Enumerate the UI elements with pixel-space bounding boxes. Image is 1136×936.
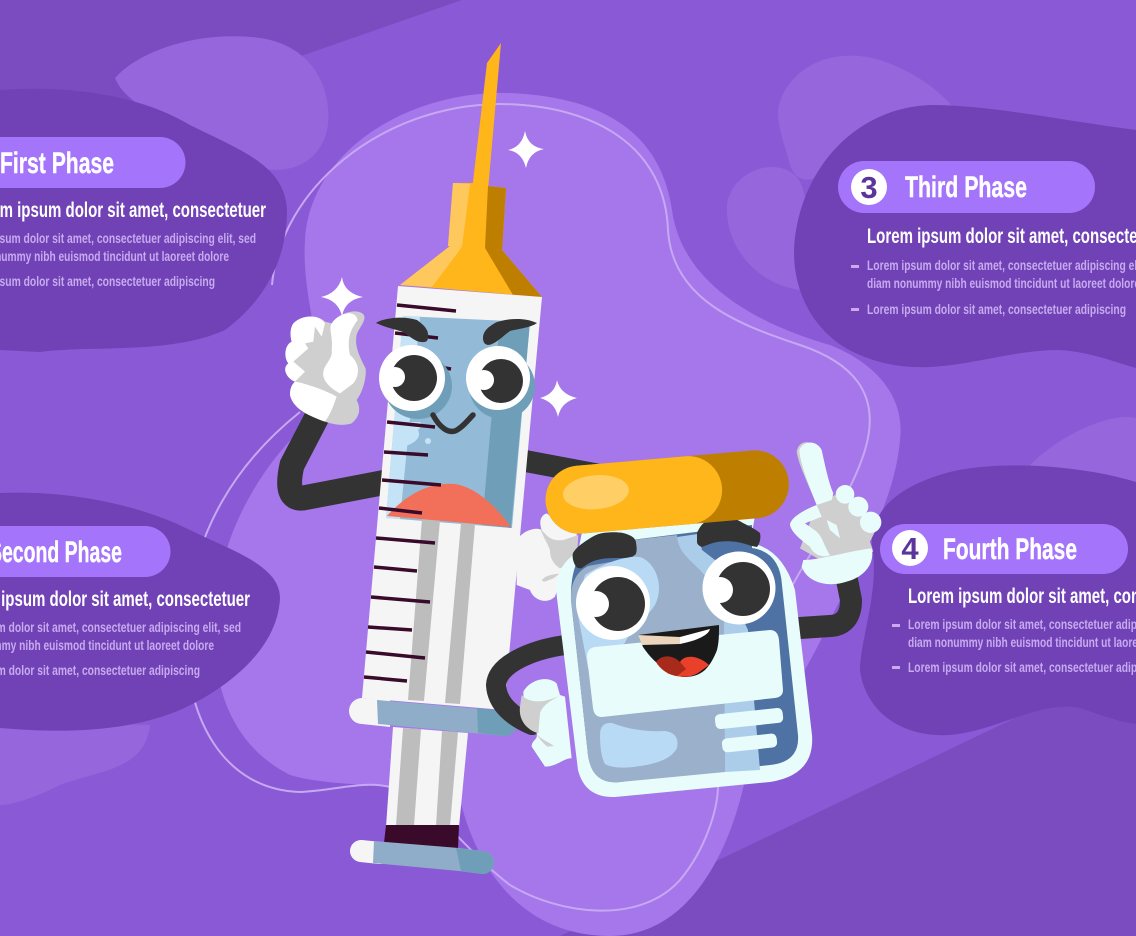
body text [892, 616, 1136, 675]
pill heading [0, 137, 186, 188]
vial character [496, 442, 881, 797]
sparkles [321, 131, 577, 417]
pill heading [0, 526, 170, 577]
flange [349, 698, 390, 727]
syringe arms [290, 415, 600, 498]
needle and hub [400, 43, 542, 297]
vial body [556, 516, 812, 797]
tick marks [364, 305, 456, 681]
vial eyes [576, 552, 776, 640]
plunger [361, 727, 494, 874]
pill heading: 4 [901, 531, 919, 566]
vial side hand [520, 679, 572, 767]
vial pointing hand [790, 442, 881, 584]
vial label [587, 630, 784, 753]
vial capsule cap [543, 447, 792, 536]
vial back hand [517, 513, 578, 601]
background blob [214, 93, 901, 936]
body text [851, 257, 1136, 317]
vial glass [571, 525, 798, 782]
decorative line [186, 104, 870, 911]
vial eyebrows [573, 517, 760, 568]
syringe character [285, 43, 600, 874]
vial mouth [638, 625, 719, 677]
panel: first phase [0, 89, 287, 352]
panel: third phase [794, 105, 1136, 368]
syringe hand [285, 311, 366, 425]
body text [0, 230, 256, 289]
pill heading: 3 [860, 170, 878, 205]
syringe face [376, 318, 537, 431]
vial arms [496, 580, 851, 725]
panel: second phase [0, 493, 280, 731]
barrel [349, 286, 542, 736]
pill heading [838, 161, 1095, 213]
panel: fourth phase [860, 465, 1136, 735]
pill heading: Fourth Phase [943, 533, 1077, 566]
body text [0, 619, 241, 678]
pill heading: Third Phase [905, 171, 1027, 204]
pill heading [880, 524, 1128, 574]
pill heading: First Phase [0, 147, 114, 180]
